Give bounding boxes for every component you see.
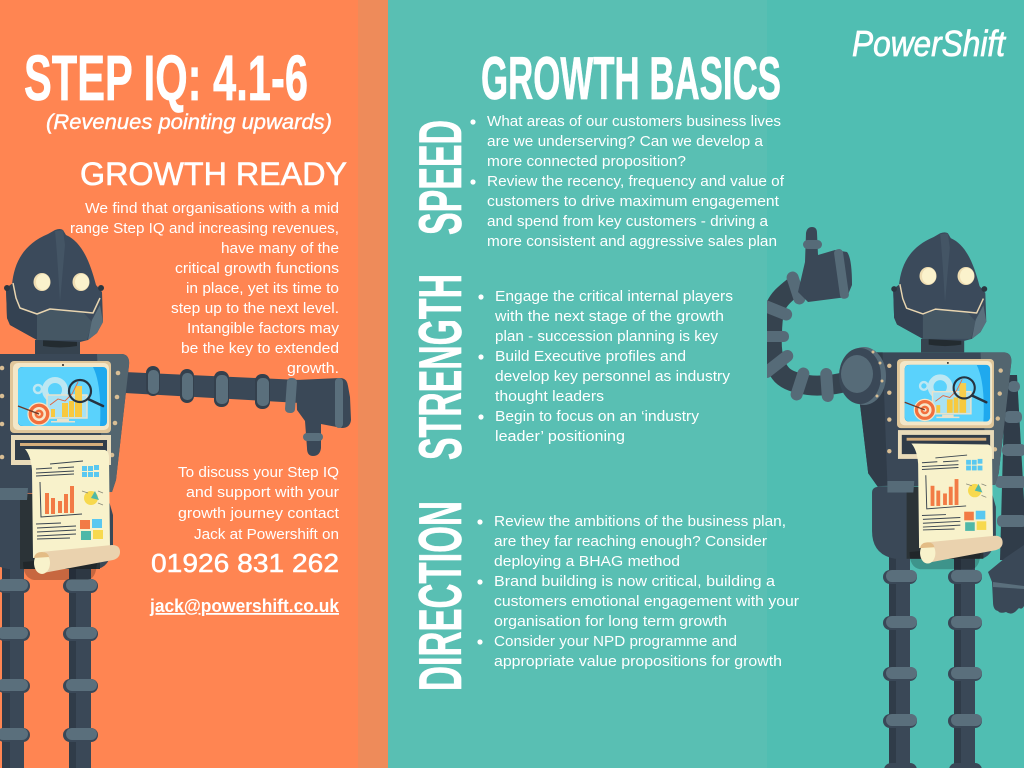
rotated label: speed: SPEED [407, 120, 474, 235]
robot: thumbs-down figure [0, 229, 351, 768]
robot body [0, 229, 129, 580]
phone number: 01926 831 262 [151, 548, 339, 578]
arm raised with thumb up [767, 227, 852, 402]
text block: growth ready description: be the key to extended [181, 340, 339, 357]
rotated label: strength: STRENGTH [407, 274, 474, 460]
text block: contact prompt: and support with your [186, 484, 339, 501]
title: STEP IQ: 4.1-6 [24, 42, 308, 114]
legs [883, 540, 982, 768]
bullet list: strength: with the next stage of the growth [494, 308, 724, 325]
text block: growth ready description: growth. [287, 360, 339, 377]
subtitle: (Revenues pointing upwards) [46, 111, 332, 134]
text block: growth ready description: range Step IQ and increasing revenues, [70, 220, 339, 237]
bullet list: direction [477, 513, 799, 670]
bullet list: speed: more connected proposition? [487, 153, 686, 170]
bullet list: strength: plan - succession planning is key [495, 328, 718, 345]
legs [0, 540, 98, 768]
heading: growth ready: GROWTH READY [80, 156, 347, 192]
bullet list: strength: leader’ positioning [495, 428, 625, 445]
bullet list: direction: customers emotional engagement with your [494, 593, 799, 610]
robot: thumbs-up figure [756, 227, 1024, 768]
bullet list: speed: What areas of our customers business lives [487, 113, 781, 130]
bullet list: strength: Build Executive profiles and [495, 348, 686, 365]
text block: contact prompt [178, 464, 340, 543]
bullet list: speed: customers to drive maximum engagement [487, 193, 780, 210]
bullet list: speed: Review the recency, frequency and value of [487, 173, 785, 190]
eyes [34, 273, 90, 291]
bullet list: speed: are we underserving? Can we develop a [487, 133, 764, 150]
bullet list: strength: Begin to focus on an ‘industry [495, 408, 700, 425]
bullet list: direction: Review the ambitions of the business plan, [494, 513, 786, 530]
bullet list: strength: Engage the critical internal players [495, 288, 733, 305]
shoulder joint [839, 347, 886, 405]
text block: contact prompt: Jack at Powershift on [194, 526, 339, 543]
arm pointing right with thumb down [125, 366, 351, 456]
eyes [920, 267, 974, 285]
bullet list: direction: organisation for long term growth [494, 613, 727, 630]
text block: growth ready description [70, 200, 340, 377]
hanging arm and hand [988, 375, 1024, 614]
heading: growth basics: GROWTH BASICS [481, 45, 781, 112]
bullet list: direction: deploying a BHAG method [494, 553, 680, 570]
panel: teal background [388, 0, 1024, 768]
bullet list: direction: are they far reaching enough? Consider [494, 533, 767, 550]
panel: lighter teal column [388, 0, 767, 768]
text block: growth ready description: in place, yet its time to [186, 280, 339, 297]
bullet list: strength [478, 288, 733, 445]
text block: growth ready description: have many of the [221, 240, 339, 257]
bullet list: speed: and spend from key customers - driving a [487, 213, 769, 230]
rotated label: direction: DIRECTION [407, 501, 474, 691]
bullet list: speed [470, 113, 785, 250]
robot body [854, 232, 1011, 569]
panel: orange divider stripe [358, 0, 388, 768]
bullet list: direction: Consider your NPD programme and [494, 633, 737, 650]
email link: jack@powershift.co.uk [149, 596, 340, 616]
bullet list: strength: thought leaders [495, 388, 604, 405]
bullet list: direction: appropriate value propositions for growth [494, 653, 782, 670]
text block: growth ready description: We find that organisations with a mid [85, 200, 339, 217]
text block: growth ready description: critical growth functions [175, 260, 339, 277]
text block: contact prompt: growth journey contact [178, 505, 340, 522]
logo: PowerShift [852, 23, 1007, 64]
text block: growth ready description: step up to the next level. [171, 300, 339, 317]
text block: growth ready description: Intangible factors may [187, 320, 340, 337]
bullet list: speed: more consistent and aggressive sales plan [487, 233, 777, 250]
panel: orange background [0, 0, 358, 768]
text block: contact prompt: To discuss your Step IQ [178, 464, 339, 481]
bullet list: direction: Brand building is now critical, building a [494, 573, 776, 590]
bullet list: strength: develop key personnel as industry [495, 368, 731, 385]
